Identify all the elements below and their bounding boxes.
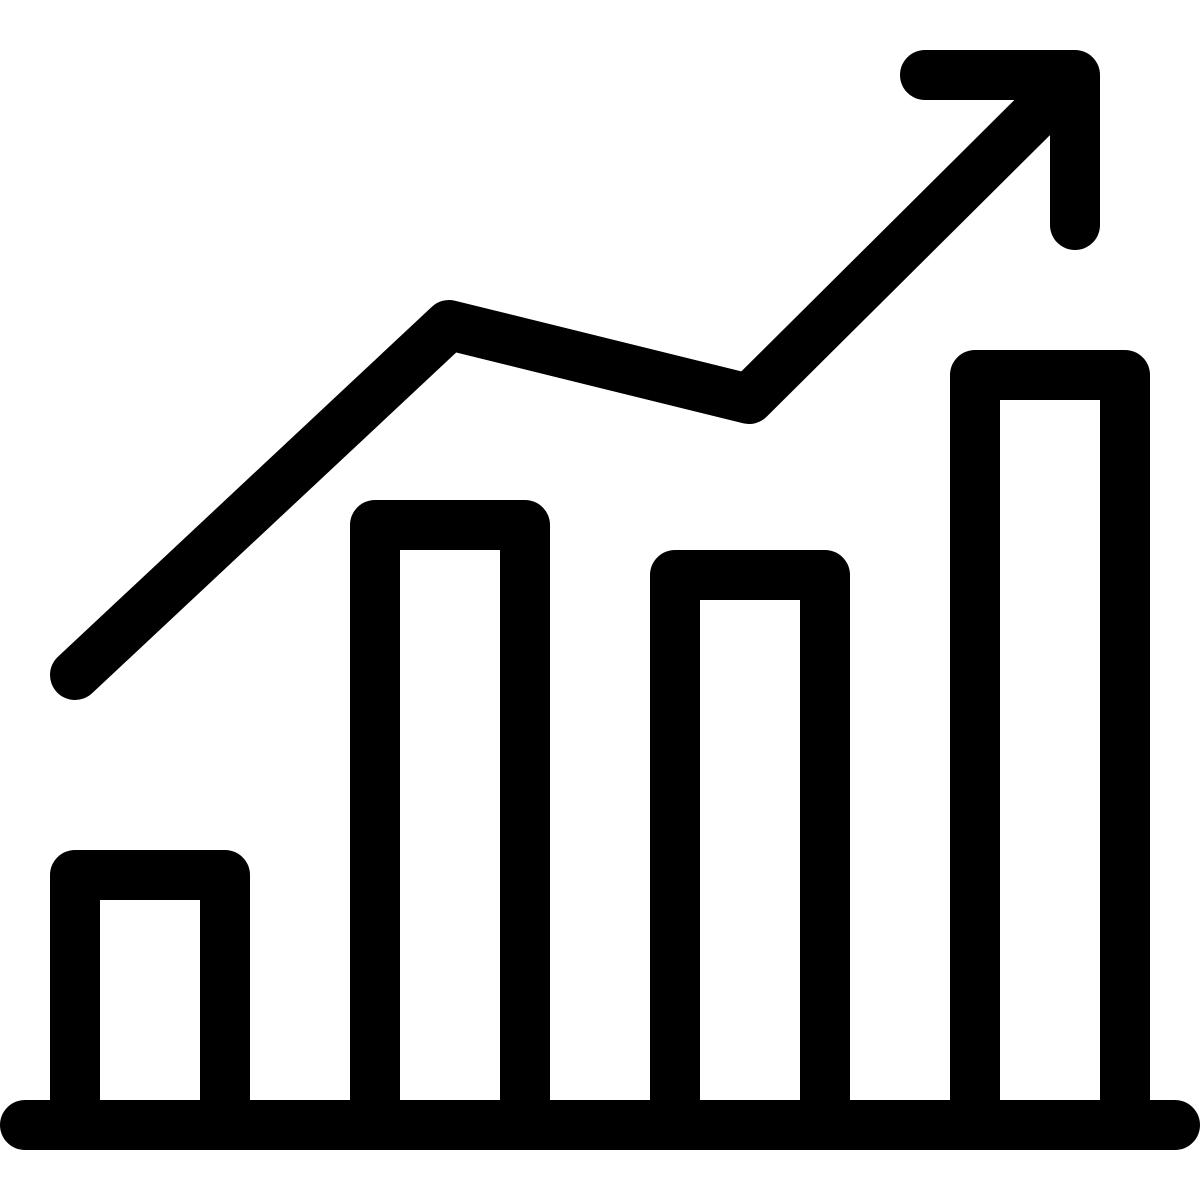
bar 2 — [375, 525, 525, 1125]
bar 4 — [975, 375, 1125, 1125]
baseline — [25, 1100, 1175, 1150]
bar 1 — [75, 875, 225, 1125]
arrowhead — [925, 75, 1075, 225]
trend line — [75, 78, 1072, 675]
bar 3 — [675, 575, 825, 1125]
